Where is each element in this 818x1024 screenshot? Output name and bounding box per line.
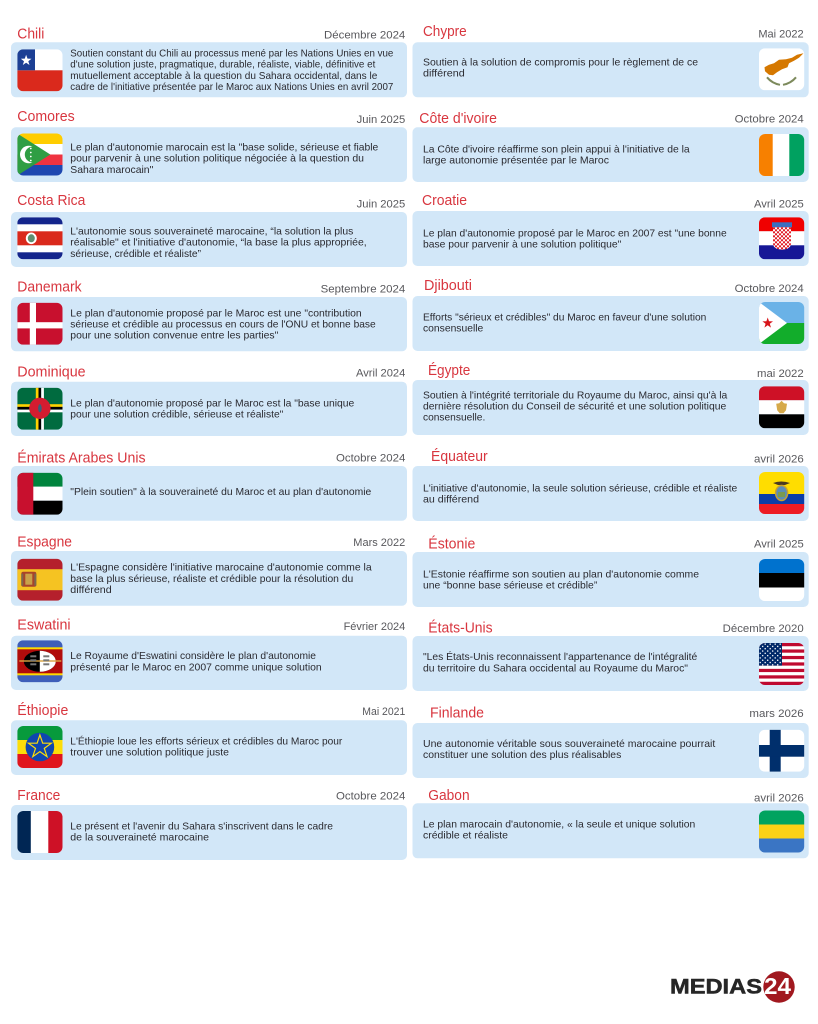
country name: Chili: Chili: [17, 25, 44, 42]
body text: [423, 650, 698, 674]
body text: Le plan d'autonomie proposé par le Maroc est une "contribution: [70, 309, 362, 320]
body text: "Les États-Unis reconnaissent l'appartenance de l'intégralité: [423, 650, 698, 663]
country name: Danemark: Danemark: [17, 279, 82, 296]
panel: Eswatini: [11, 617, 407, 690]
icon: flag of Cyprus: [759, 48, 805, 90]
panel: Égypte: [412, 362, 809, 435]
date: Février 2024: [344, 621, 405, 633]
card background: [11, 720, 407, 775]
date: Mai 2021: [362, 706, 405, 718]
body text: "Plein soutien" à la souveraineté du Maroc et au plan d'autonomie: [70, 487, 372, 498]
body text: différend: [70, 585, 112, 596]
card background: [412, 636, 809, 691]
body text: sérieuse, crédible et réaliste”: [70, 249, 202, 260]
body text: pour une solution convenue entre les parties": [70, 330, 279, 342]
body text: différend: [423, 69, 465, 80]
date: avril 2026: [754, 453, 804, 465]
body text: Le plan d'autonomie proposé par le Maroc est la "base unique: [70, 399, 355, 410]
icon: flag of Chile: [17, 49, 63, 91]
icon: flag of Comoros: [17, 134, 63, 176]
body text: Sahara marocain": [70, 165, 154, 176]
card background: [11, 127, 407, 182]
date: Octobre 2024: [336, 453, 405, 465]
body text: L'autonomie sous souveraineté marocaine, “la solution la plus: [70, 227, 353, 238]
country name: Émirats Arabes Unis: Émirats Arabes Unis: [17, 450, 146, 467]
icon: flag of USA: [759, 643, 805, 685]
body text: L'initiative d'autonomie, la seule solution sérieuse, crédible et réaliste: [423, 483, 738, 494]
card background: [11, 42, 407, 97]
card background: [412, 296, 809, 351]
body text: large autonomie présentée par le Maroc: [423, 155, 609, 166]
body text: Efforts "sérieux et crédibles" du Maroc en faveur d'une solution: [423, 313, 707, 324]
country name: Égypte: Égypte: [428, 362, 470, 379]
panel: États-Unis: [412, 620, 809, 691]
body text: Le Royaume d'Eswatini considère le plan d'autonomie: [70, 651, 316, 662]
body text: [70, 734, 343, 759]
panel: Éthiopie: [11, 702, 407, 775]
country name: Comores: Comores: [17, 108, 75, 125]
icon: flag of Denmark: [17, 303, 63, 345]
date: Juin 2025: [357, 199, 405, 211]
body text: [423, 313, 707, 335]
body text: [70, 49, 394, 93]
icon: flag of Costa Rica: [17, 217, 63, 259]
country name: Finlande: Finlande: [430, 705, 484, 722]
body text: base pour parvenir à une solution politique": [423, 239, 622, 250]
body text: Soutien à l'intégrité territoriale du Royaume du Maroc, ainsi qu'à la: [423, 390, 728, 401]
panel: Comores: [11, 108, 407, 182]
country name: Croatie: Croatie: [422, 192, 467, 209]
panel: Chypre: [412, 23, 809, 97]
panel: Finlande: [412, 705, 809, 778]
date: Juin 2025: [357, 114, 405, 126]
body text: au différend: [423, 495, 479, 506]
body text: [70, 822, 333, 844]
body text: pour parvenir à une solution politique négociée à la question du: [70, 154, 364, 165]
icon: flag of Croatia: [759, 217, 805, 259]
icon: flag of Egypt: [759, 386, 805, 428]
country name: Eswatini: Eswatini: [17, 617, 71, 634]
date: Octobre 2024: [735, 283, 804, 295]
card background: [412, 552, 809, 607]
body text: Le plan d'autonomie marocain est la "base solide, sérieuse et fiable: [70, 143, 379, 154]
body text: pour une solution crédible, sérieuse et réaliste": [70, 410, 284, 421]
body text: [423, 390, 728, 424]
body text: sérieuse et crédible au processus en cours de l'ONU et bonne base: [70, 320, 376, 330]
body text: d'une solution juste, pragmatique, durable, réaliste, viable, définitive et: [70, 60, 375, 71]
card background: [11, 551, 407, 606]
panel: Croatie: [412, 192, 809, 266]
icon: flag of France: [17, 811, 63, 853]
country name: Costa Rica: Costa Rica: [17, 192, 86, 209]
icon: flag of Dominica: [17, 388, 63, 430]
icon: flag of Eswatini: [17, 640, 63, 682]
body text: du territoire du Sahara occidental au Royaume du Maroc": [423, 663, 688, 674]
body text: [423, 569, 699, 591]
date: Octobre 2024: [336, 790, 405, 802]
body text: [423, 144, 690, 166]
date: Octobre 2024: [735, 114, 804, 126]
body text: [70, 651, 322, 673]
body text: L'Espagne considère l'initiative marocaine d'autonomie comme la: [70, 563, 372, 574]
country name: Gabon: Gabon: [428, 787, 470, 804]
body text: présenté par le Maroc en 2007 comme unique solution: [70, 662, 322, 673]
body text: [70, 309, 376, 342]
card background: [11, 636, 407, 690]
date: mars 2026: [749, 708, 804, 720]
country name: Espagne: Espagne: [17, 534, 72, 551]
panel: Djibouti: [412, 277, 809, 351]
country name: Chypre: Chypre: [423, 23, 467, 40]
body text: L'Estonie réaffirme son soutien au plan d'autonomie comme: [423, 569, 699, 580]
body text: [423, 228, 727, 250]
panel: Côte d'ivoire: [412, 110, 809, 182]
body text: Le présent et l'avenir du Sahara s'inscrivent dans le cadre: [70, 822, 333, 833]
body text: mutuellement acceptable à la question du Sahara occidental, dans le: [70, 71, 378, 82]
country name: Éthiopie: Éthiopie: [17, 702, 68, 719]
card background: [412, 723, 809, 778]
body text: [423, 483, 738, 506]
card background: [412, 42, 809, 97]
body text: crédible et réaliste: [423, 830, 508, 841]
body text: Soutien constant du Chili au processus mené par les Nations Unies en vue: [70, 49, 393, 60]
icon: flag of Ethiopia: [17, 726, 63, 768]
body text: trouver une solution politique juste: [70, 748, 229, 759]
body text: La Côte d'ivoire réaffirme son plein appui à l'initiative de la: [423, 144, 690, 155]
body text: Soutien à la solution de compromis pour le règlement de ce: [423, 58, 698, 69]
card background: [412, 466, 809, 521]
card background: [412, 211, 809, 266]
card background: [412, 127, 809, 182]
body text: constituer une solution des plus réalisables: [423, 750, 621, 761]
card background: [412, 803, 809, 858]
body text: dernière résolution du Conseil de sécurité et une solution politique: [423, 402, 727, 413]
card background: [412, 380, 809, 435]
icon: flag of UAE: [17, 473, 63, 515]
card background: [11, 297, 407, 351]
body text: Le plan d'autonomie proposé par le Maroc en 2007 est "une bonne: [423, 228, 727, 239]
body text: une “bonne base sérieuse et crédible”: [423, 580, 598, 591]
panel: Espagne: [11, 534, 407, 606]
body text: cadre de l'initiative présentée par le Maroc aux Nations Unies en avril 2007: [70, 82, 394, 93]
date: Avril 2024: [356, 368, 405, 380]
icon: flag of Ivory Coast: [759, 134, 805, 176]
body text: réalisable" et l'initiative d'autonomie, “la base la plus appropriée,: [70, 238, 367, 249]
card background: [11, 805, 407, 860]
country name: Djibouti: Djibouti: [424, 277, 472, 294]
date: Décembre 2024: [324, 30, 405, 42]
body text: [70, 227, 367, 260]
card background: [11, 212, 407, 267]
panel: Danemark: [11, 279, 407, 351]
country name: France: France: [17, 787, 60, 804]
body text: [70, 563, 372, 596]
logo: Medias24: MEDIAS: [670, 976, 762, 998]
body text: [423, 819, 696, 841]
icon: flag of Spain: [17, 559, 63, 601]
icon: flag of Gabon: [759, 810, 805, 852]
country name: Équateur: Équateur: [431, 448, 488, 465]
date: avril 2026: [754, 793, 804, 805]
date: Avril 2025: [754, 198, 804, 210]
logo: Medias24: [670, 971, 795, 1003]
date: mai 2022: [757, 368, 804, 380]
country name: Éstonie: Éstonie: [428, 536, 475, 553]
country name: Dominique: Dominique: [17, 364, 86, 381]
date: Avril 2025: [754, 538, 804, 550]
panel: France: [11, 787, 407, 860]
panel: Émirats Arabes Unis: [11, 450, 407, 521]
body text: de la souveraineté marocaine: [70, 833, 209, 844]
panel: Éstonie: [412, 536, 809, 607]
body text: [70, 143, 379, 176]
date: Décembre 2020: [723, 623, 804, 635]
date: Mars 2022: [353, 537, 405, 549]
body text: [423, 739, 715, 761]
country name: Côte d'ivoire: Côte d'ivoire: [419, 110, 497, 127]
panel: Dominique: [11, 364, 407, 436]
panel: Équateur: [412, 448, 809, 521]
body text: [70, 399, 355, 421]
country name: États-Unis: États-Unis: [428, 620, 493, 637]
panel: Gabon: [412, 787, 809, 858]
icon: flag of Djibouti: [759, 302, 805, 344]
panel: Chili: [11, 25, 407, 97]
icon: flag of Estonia: [759, 559, 805, 602]
body text: base la plus sérieuse, réaliste et crédible pour la résolution du: [70, 574, 354, 585]
logo: Medias24: 24: [764, 973, 791, 999]
body text: Le plan marocain d'autonomie, « la seule et unique solution: [423, 819, 696, 830]
body text: consensuelle.: [423, 413, 485, 424]
date: Mai 2022: [758, 29, 804, 41]
date: Septembre 2024: [321, 284, 405, 296]
body text: L'Éthiopie loue les efforts sérieux et crédibles du Maroc pour: [70, 734, 343, 747]
panel: Costa Rica: [11, 192, 407, 267]
body text: [423, 58, 698, 80]
body text: Une autonomie véritable sous souveraineté marocaine pourrait: [423, 739, 715, 750]
body text: consensuelle: [423, 324, 484, 335]
card background: [11, 466, 407, 521]
icon: flag of Ecuador: [759, 472, 805, 514]
card background: [11, 382, 407, 436]
icon: flag of Finland: [759, 730, 805, 772]
